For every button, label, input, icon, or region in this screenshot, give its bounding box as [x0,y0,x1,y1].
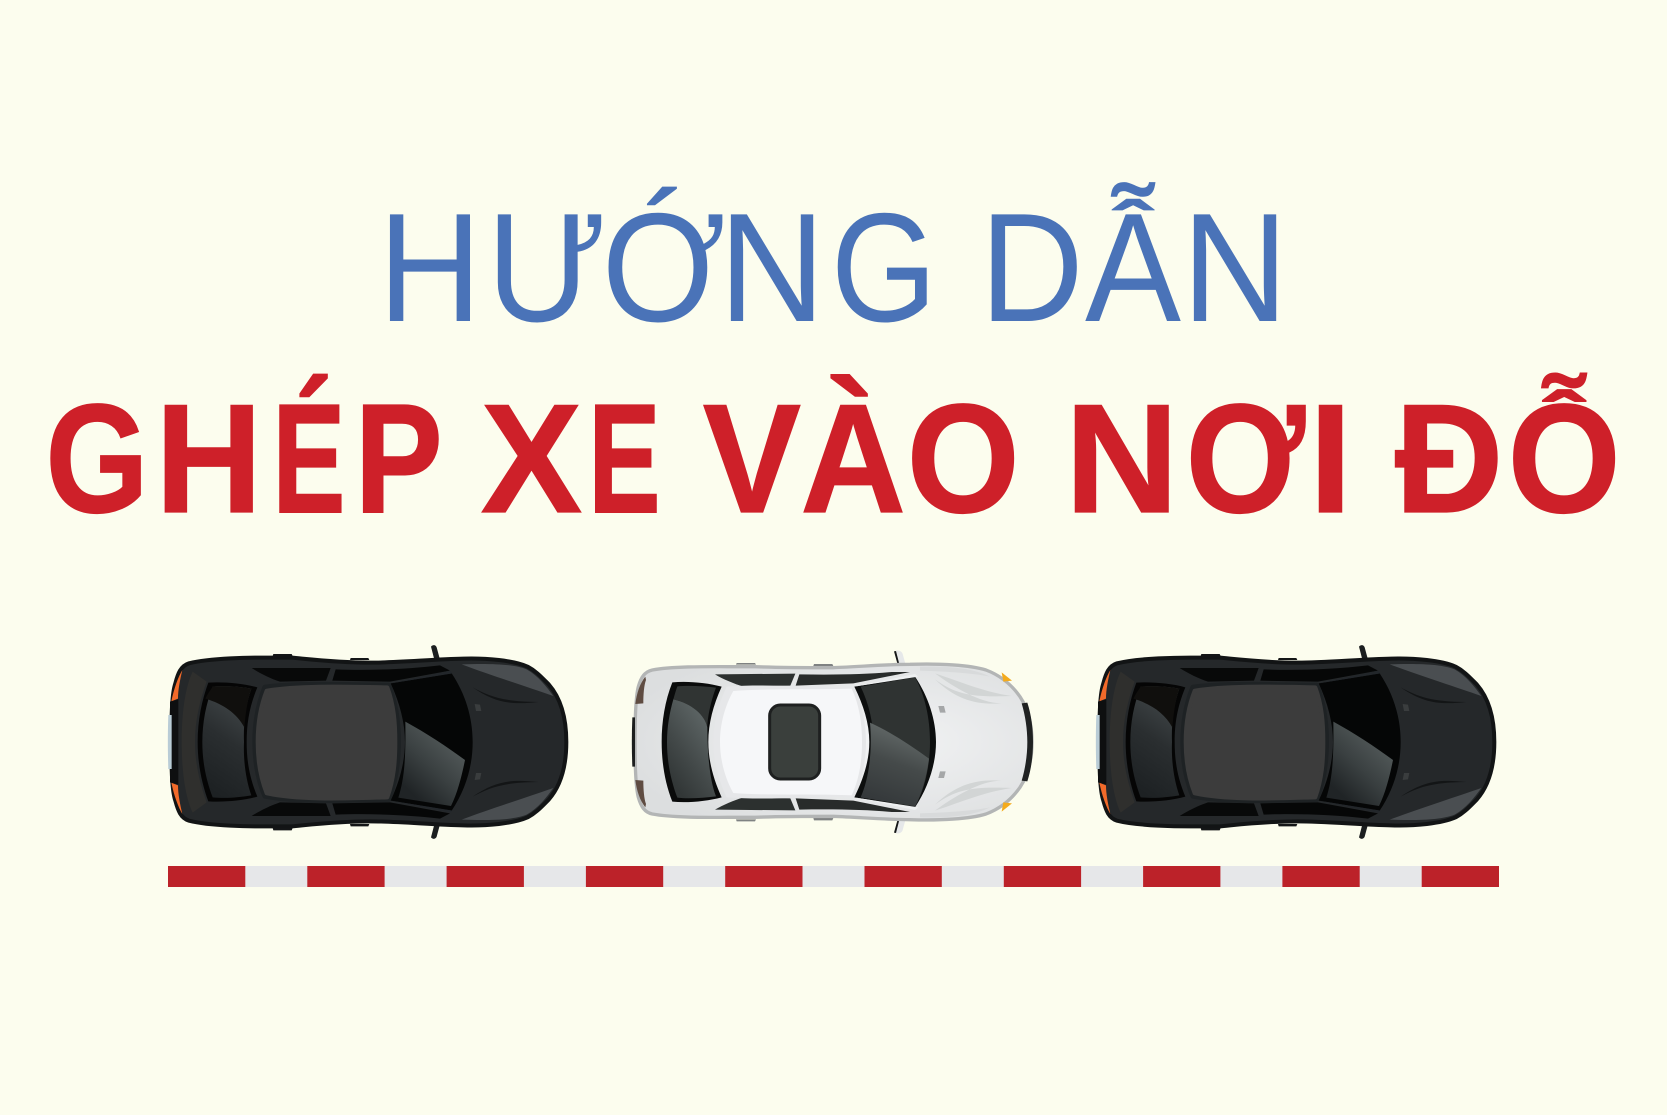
white car sunroof [770,705,820,779]
car: dark left [168,645,566,839]
white car front grille [1022,703,1033,781]
white car rear bumper strip [632,717,635,767]
white car roof [713,685,866,799]
title: second line: N [1065,372,1179,545]
title: second line: É [273,372,345,545]
title: second line: O [907,372,1020,545]
title: second line: H [155,372,262,545]
white car rear lights [635,677,646,807]
title: second line: V [703,372,801,545]
title: first line: N [719,181,825,354]
title: first line: D [980,181,1084,354]
white car hood details [920,667,1012,713]
title: first line: N [1182,181,1288,354]
title: second line: E [588,372,660,545]
title: second line: Đ [1395,372,1503,545]
title: second line: G [45,372,149,545]
dark car rear deck [182,672,207,813]
title: second line: I [1309,372,1352,545]
dark car mirrors [427,645,448,671]
dark car hood details [462,664,553,711]
white car mirrors [891,651,913,675]
title: first line: G [831,181,937,354]
white car windshield [854,677,936,807]
white car rear window [662,682,722,802]
title: first line: Ư [487,181,607,354]
title: second line: Ơ [1186,372,1306,545]
title: second line: À [800,372,906,545]
dark car side windows [252,665,450,682]
white car handles [736,663,833,821]
dark car roof [255,685,398,800]
dark car rear plate [170,699,178,785]
title: second line: Ỗ [1508,372,1621,545]
dark car rear window [198,682,257,802]
title: first line: Ẫ [1085,181,1182,354]
title: first line: Ớ [602,181,726,354]
title: second line: X [481,372,582,545]
car: white centre [632,651,1033,833]
white car body [635,664,1032,820]
dark car body [171,658,566,826]
dark car windshield [391,673,473,811]
dark car handles [273,654,369,830]
title: first line: H [378,181,482,354]
title: second line: P [355,372,440,545]
car: dark right [1096,645,1494,839]
curb line [168,866,1499,887]
white car side windows [715,672,910,687]
white car front lights [1002,672,1012,812]
dark car rear lights [171,670,182,814]
